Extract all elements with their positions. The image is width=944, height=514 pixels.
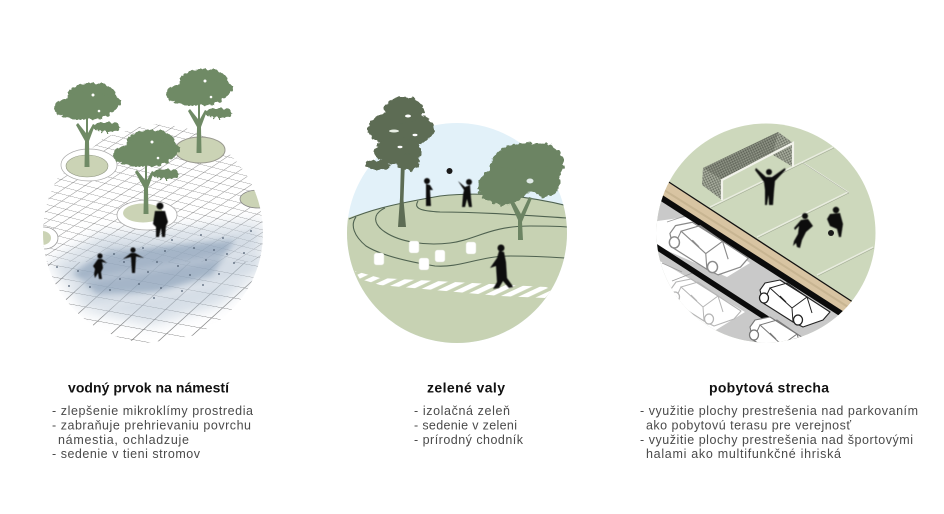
silhouette: player right [827, 207, 843, 237]
text block: zelené valy benefits: - sedenie v zeleni [414, 418, 517, 432]
planter: right edge [240, 190, 260, 208]
roof edge lines [668, 182, 852, 302]
text block: zelené valy benefits: - prírodný chodník [414, 433, 524, 447]
silhouette: woman walking [490, 244, 513, 289]
ball [446, 168, 452, 174]
water nozzles [56, 230, 252, 299]
text block: pobytová strecha benefits [640, 404, 918, 461]
heading: vodný prvok na námestí: vodný prvok na námestí [68, 380, 230, 396]
panel: zelené valy illustration [345, 97, 570, 345]
crosswalk stripes [355, 271, 553, 298]
pitch markings [710, 147, 873, 275]
text block: vodný prvok benefits [52, 404, 253, 461]
panel: vodný prvok na námestí illustration [43, 68, 263, 343]
tree: back right [166, 69, 233, 153]
panel: pobytová strecha illustration [656, 124, 876, 342]
water feature [50, 222, 262, 325]
contour lines [349, 194, 568, 266]
text block: vodný prvok benefits: - zabraňuje prehrievaniu povrchu [52, 418, 251, 432]
planter: centre [117, 200, 177, 230]
car: lower bottom [748, 316, 802, 342]
tree: centre [113, 130, 180, 214]
heading: pobytová strecha: pobytová strecha [709, 380, 829, 396]
tree: back left [54, 83, 121, 167]
silhouette: child left [424, 178, 433, 206]
car: upper [669, 222, 748, 275]
text block: zelené valy benefits: - izolačná zeleň [414, 404, 510, 418]
text block: pobytová strecha benefits: halami ako multifunkčné ihriská [646, 447, 841, 461]
football [828, 230, 834, 236]
roof lawn [656, 124, 876, 342]
text block: vodný prvok benefits: - sedenie v tieni stromov [52, 447, 201, 461]
silhouette: seated man [153, 202, 168, 237]
seating stools [374, 241, 476, 270]
roof edge band [658, 181, 852, 313]
text block: pobytová strecha benefits: ako pobytovú terasu pre verejnosť [646, 418, 851, 432]
text block: pobytová strecha benefits: - využitie plochy prestrešenia nad športovými [640, 433, 913, 447]
text block: pobytová strecha benefits: - využitie plochy prestrešenia nad parkovaním [640, 404, 918, 418]
bay markings [662, 215, 700, 281]
car: lower [670, 279, 741, 326]
silhouette: child with arms spread [123, 247, 144, 273]
car: front [760, 280, 830, 327]
planter: back left [61, 149, 117, 181]
plaza paving grid [40, 120, 266, 346]
heading: zelené valy: zelené valy [427, 380, 505, 396]
text block: vodný prvok benefits: námestia, ochladzuje [58, 433, 189, 447]
tree: right [478, 143, 564, 240]
parking bays [650, 217, 750, 277]
silhouette: child running [93, 253, 107, 279]
sky [347, 123, 567, 343]
tree: dark left [366, 97, 434, 227]
soccer goal [702, 132, 793, 200]
text block: zelené valy benefits [414, 404, 524, 447]
planter: left edge [43, 226, 58, 250]
parking deck [656, 201, 848, 342]
silhouette: player left [793, 213, 813, 248]
green mound [345, 194, 570, 345]
planter: back right [175, 137, 225, 163]
text block: vodný prvok benefits: - zlepšenie mikroklímy prostredia [52, 404, 253, 418]
silhouette: child right throwing [458, 179, 472, 207]
silhouette: goalkeeper [755, 168, 786, 205]
